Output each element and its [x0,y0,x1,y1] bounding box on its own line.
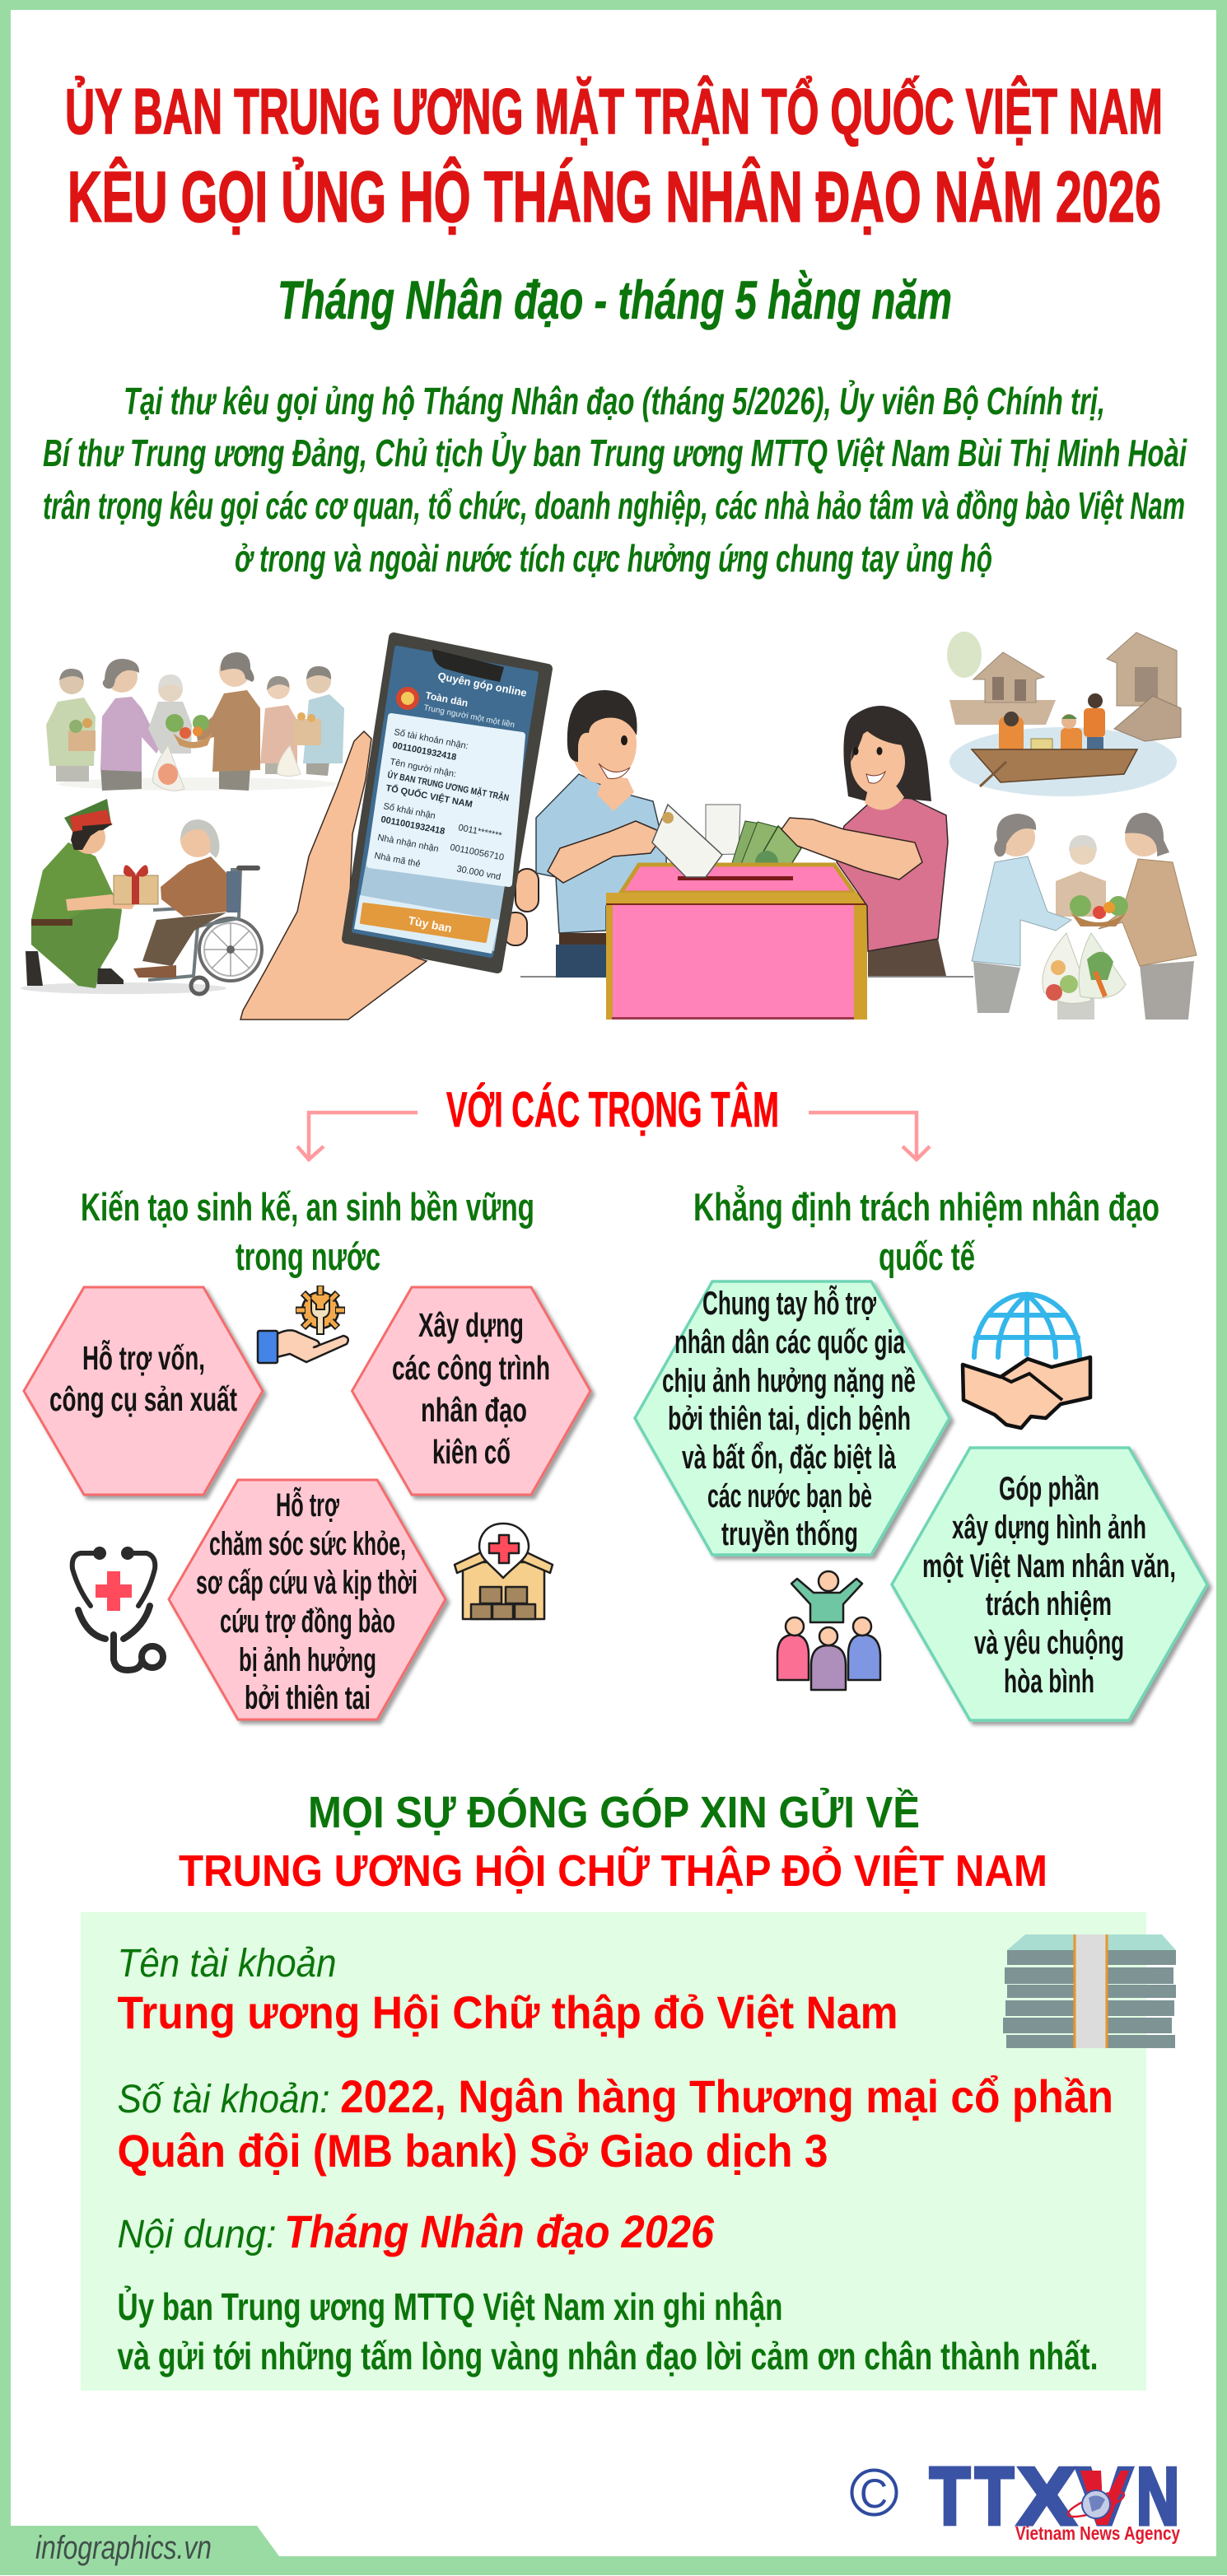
transfer content [117,2205,715,2257]
copyright mark: C [860,2471,888,2517]
thank you note: Ủy ban Trung ương MTTQ Việt Nam xin ghi nhận [117,2285,782,2328]
illustration: flood relief boat [947,632,1181,796]
icon: relief warehouse [455,1524,553,1619]
illustration: phone in hand with donation app: Số tài khoản nhận: [393,727,469,751]
illustration: phone in hand with donation app: Nhà nhận nhận [376,833,440,854]
hexagon: healthcare and relief: chăm sóc sức khỏe, [209,1526,406,1562]
hexagon: solid humanitarian works: nhân đạo [421,1391,527,1429]
icon: group of people [777,1571,880,1690]
illustration: phone in hand with donation app: ỦY BAN TRUNG ƯƠNG MẶT TRẬN [386,769,510,804]
illustration: man donating envelope [520,690,667,978]
arrow: right [809,1113,930,1160]
heading: contribution destination: MỌI SỰ ĐÓNG GÓP XIN GỬI VỀ [308,1788,920,1837]
hexagon: capital and tools [24,1287,263,1495]
logo: TTXVN [930,2451,1180,2544]
hexagon: humane Vietnam image: trách nhiệm [986,1586,1112,1622]
illustration: phone in hand with donation app: Nhà mã thẻ [373,851,422,870]
hexagon: solid humanitarian works: các công trình [392,1349,550,1387]
transfer content: Tháng Nhân đạo 2026 [284,2205,715,2257]
hexagon: healthcare and relief: bởi thiên tai [245,1680,371,1716]
icon: globe and handshake [963,1295,1090,1428]
footer tab [0,2526,279,2575]
section heading with arrows: VỚI CÁC TRỌNG TÂM [446,1082,779,1137]
hexagon: healthcare and relief: cứu trợ đồng bào [220,1603,395,1640]
illustration: woman donating money [781,706,973,977]
illustration: phone in hand with donation app: Tên người nhận: [389,757,457,780]
arrow: left [297,1113,418,1160]
hexagon: support to other nations: bởi thiên tai, dịch bệnh [668,1401,911,1437]
hexagon: solid humanitarian works [352,1287,590,1495]
illustration: phone in hand with donation app: TỔ QUỐC VIỆT NAM [385,782,474,810]
hexagon: capital and tools: Hỗ trợ vốn, [82,1339,205,1377]
transfer content: Nội dung: [117,2213,277,2256]
hexagon: humane Vietnam image: hòa bình [1004,1664,1094,1700]
account name: Tên tài khoản [117,1942,336,1986]
hexagon: healthcare and relief: sơ cấp cứu và kịp thời [196,1565,418,1601]
account number: Số tài khoản: [117,2078,329,2121]
hexagon: healthcare and relief: bị ảnh hưởng [239,1642,376,1678]
hexagon: support to other nations: Chung tay hỗ trợ [702,1284,876,1322]
hexagon: humane Vietnam image: Góp phần [999,1471,1099,1507]
copyright mark [851,2471,896,2517]
illustration: officer giving gift to elderly woman [21,799,262,994]
account number: Quân đội (MB bank) Sở Giao dịch 3 [117,2125,828,2177]
illustration: donation box with envelopes and money [606,805,867,1020]
footer tab: infographics.vn [35,2530,212,2566]
illustration: phone in hand with donation app: Số khải nhận [382,801,436,821]
heading: domestic focus [81,1185,534,1278]
illustration: phone in hand with donation app [240,637,548,1020]
icon: stack of money [1003,1934,1176,2048]
illustration: phone in hand with donation app: Quyên góp online [436,670,528,699]
logo: TTXVN: T [930,2451,970,2541]
illustration: phone in hand with donation app: Toàn dân [424,689,469,709]
hexagon: support to other nations: và bất ổn, đặc biệt là [682,1440,896,1476]
logo: TTXVN: T [975,2451,1014,2541]
heading: contribution destination [179,1788,1047,1896]
panel: bank account details [81,1912,1146,2391]
illustration: phone in hand with donation app: 0011******* [457,823,503,841]
logo: TTXVN: V [1076,2451,1132,2541]
illustration: phone in hand with donation app: 30.000 vnd [455,864,502,882]
account name: Trung ương Hội Chữ thập đỏ Việt Nam [117,1986,898,2038]
heading: domestic focus: trong nước [236,1234,380,1278]
thank you note [117,2285,1099,2378]
subtitle: Tháng Nhân đạo - tháng 5 hằng năm [278,269,952,330]
heading: international focus: quốc tế [879,1234,976,1278]
intro paragraph [43,380,1187,580]
illustration: phone in hand with donation app: 0011001932418 [380,814,446,837]
illustration: women sharing vegetables [972,813,1197,1020]
logo: TTXVN: Vietnam News Agency [1015,2522,1180,2544]
hexagon: support to other nations: chịu ảnh hưởng nặng nề [662,1363,916,1399]
hexagon: capital and tools: công cụ sản xuất [49,1380,237,1418]
account number [117,2070,1113,2177]
logo: TTXVN: X [1018,2451,1075,2541]
hexagon: humane Vietnam image [892,1448,1207,1720]
hexagon: healthcare and relief [169,1480,446,1720]
title [65,75,1163,237]
illustration: phone in hand with donation app: 00110056710 [449,842,505,863]
illustration: phone in hand with donation app: Trung người một một liền [422,702,516,730]
icon: stethoscope [72,1547,163,1670]
hexagon: solid humanitarian works: Xây dựng [418,1306,524,1344]
illustration: phone in hand with donation app: 0011001932418 [391,740,457,763]
hexagon: solid humanitarian works: kiên cố [432,1433,511,1471]
illustration: phone in hand with donation app: Tùy ban [407,913,453,935]
heading: international focus [693,1185,1159,1278]
hexagon: healthcare and relief: Hỗ trợ [276,1486,339,1524]
hexagon: support to other nations: truyền thống [721,1516,858,1552]
hexagon: humane Vietnam image: và yêu chuộng [974,1625,1124,1661]
hexagon: support to other nations: nhân dân các quốc gia [674,1324,905,1360]
heading: contribution destination: TRUNG ƯƠNG HỘI CHỮ THẬP ĐỎ VIỆT NAM [179,1846,1047,1896]
section heading with arrows [297,1082,930,1160]
account number: 2022, Ngân hàng Thương mại cổ phần [340,2070,1113,2122]
account name [117,1942,898,2038]
hexagon: support to other nations: các nước bạn bè [707,1478,872,1514]
icon: hand with gear [258,1286,348,1363]
logo: TTXVN: N [1136,2451,1179,2541]
hexagon: support to other nations [635,1281,949,1555]
illustration: community sharing food [46,652,344,791]
heading: domestic focus: Kiến tạo sinh kế, an sinh bền vững [81,1185,534,1229]
